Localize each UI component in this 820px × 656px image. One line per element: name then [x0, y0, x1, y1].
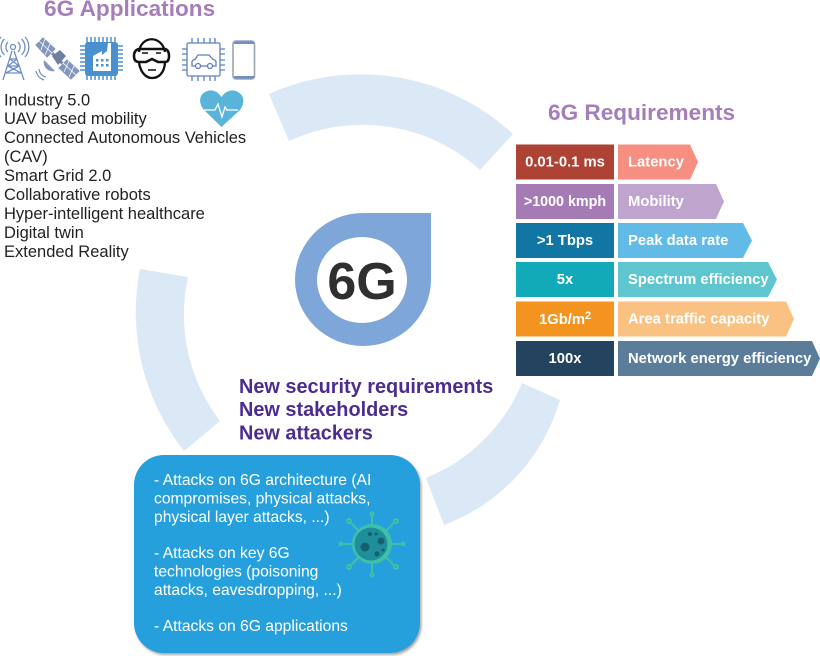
row: area traffic capacity: Area traffic capacity	[628, 312, 770, 328]
row: mobility	[516, 184, 724, 219]
text block: attack list: - Attacks on key 6G	[154, 545, 290, 562]
icon: satellite	[35, 37, 80, 80]
ring segments	[136, 74, 560, 525]
center 6G badge	[295, 213, 431, 346]
row: area traffic capacity: 2	[585, 310, 591, 322]
text block: attack list: attacks, eavesdropping, ...)	[154, 582, 342, 599]
text block: application list: Collaborative robots	[4, 186, 151, 204]
text block: new security requirements	[239, 376, 493, 444]
row: network energy efficiency	[516, 341, 820, 376]
ring arc: left	[136, 269, 220, 451]
row: area traffic capacity	[516, 302, 794, 336]
ring arc: top	[269, 74, 513, 170]
row: peak data rate: >1 Tbps	[537, 233, 593, 249]
text block: application list: (CAV)	[4, 148, 48, 166]
row: peak data rate: Peak data rate	[628, 233, 728, 249]
text block: new security requirements: New attackers	[239, 422, 373, 444]
heading: 6G Requirements: 6G Requirements	[548, 100, 735, 125]
text block: attack list	[154, 472, 371, 635]
row: network energy efficiency: Network energy efficiency	[628, 351, 812, 367]
text block: attack list: physical layer attacks, ...)	[154, 509, 330, 526]
row: latency: Latency	[628, 154, 685, 170]
row: mobility: Mobility	[628, 194, 685, 210]
requirements table	[516, 144, 820, 376]
text block: application list: UAV based mobility	[4, 110, 148, 128]
text block: application list: Industry 5.0	[4, 92, 90, 110]
text block: application list: Hyper-intelligent healthcare	[4, 205, 205, 223]
row: spectrum efficiency: Spectrum efficiency	[628, 272, 769, 288]
text block: attack list: technologies (poisoning	[154, 564, 318, 580]
row: spectrum efficiency	[516, 262, 777, 297]
row: area traffic capacity: 1Gb/m	[539, 312, 585, 328]
text block: attack list: compromises, physical attacks,	[154, 490, 370, 508]
icon: smartphone	[233, 41, 254, 79]
icon: cell tower	[0, 37, 29, 80]
text block: attack list: - Attacks on 6G architecture (AI	[154, 472, 371, 489]
panel: attacks	[134, 455, 420, 653]
icon: virus	[340, 512, 404, 576]
text block: application list	[4, 92, 246, 261]
row: latency	[516, 144, 698, 180]
ring arc: bottom right	[426, 383, 560, 525]
icon: VR headset face	[134, 39, 169, 78]
row: network energy efficiency: 100x	[549, 351, 582, 367]
text block: application list: Extended Reality	[4, 243, 129, 261]
text block: new security requirements: New stakeholders	[239, 399, 408, 421]
row: mobility: >1000 kmph	[524, 194, 606, 210]
row: latency: 0.01-0.1 ms	[525, 154, 605, 170]
row: spectrum efficiency: 5x	[557, 272, 574, 288]
text block: new security requirements: New security requirements	[239, 376, 493, 398]
row: peak data rate	[516, 223, 752, 258]
text block: attack list: - Attacks on 6G applications	[154, 618, 348, 635]
icon: car chip	[182, 38, 225, 81]
text block: application list: Connected Autonomous Vehicles	[4, 129, 246, 147]
text block: application list: Smart Grid 2.0	[4, 167, 111, 185]
text block: application list: Digital twin	[4, 224, 84, 242]
icon: heart with pulse	[200, 90, 243, 127]
center 6G badge: 6G	[327, 253, 397, 311]
icon: factory chip	[80, 37, 123, 80]
